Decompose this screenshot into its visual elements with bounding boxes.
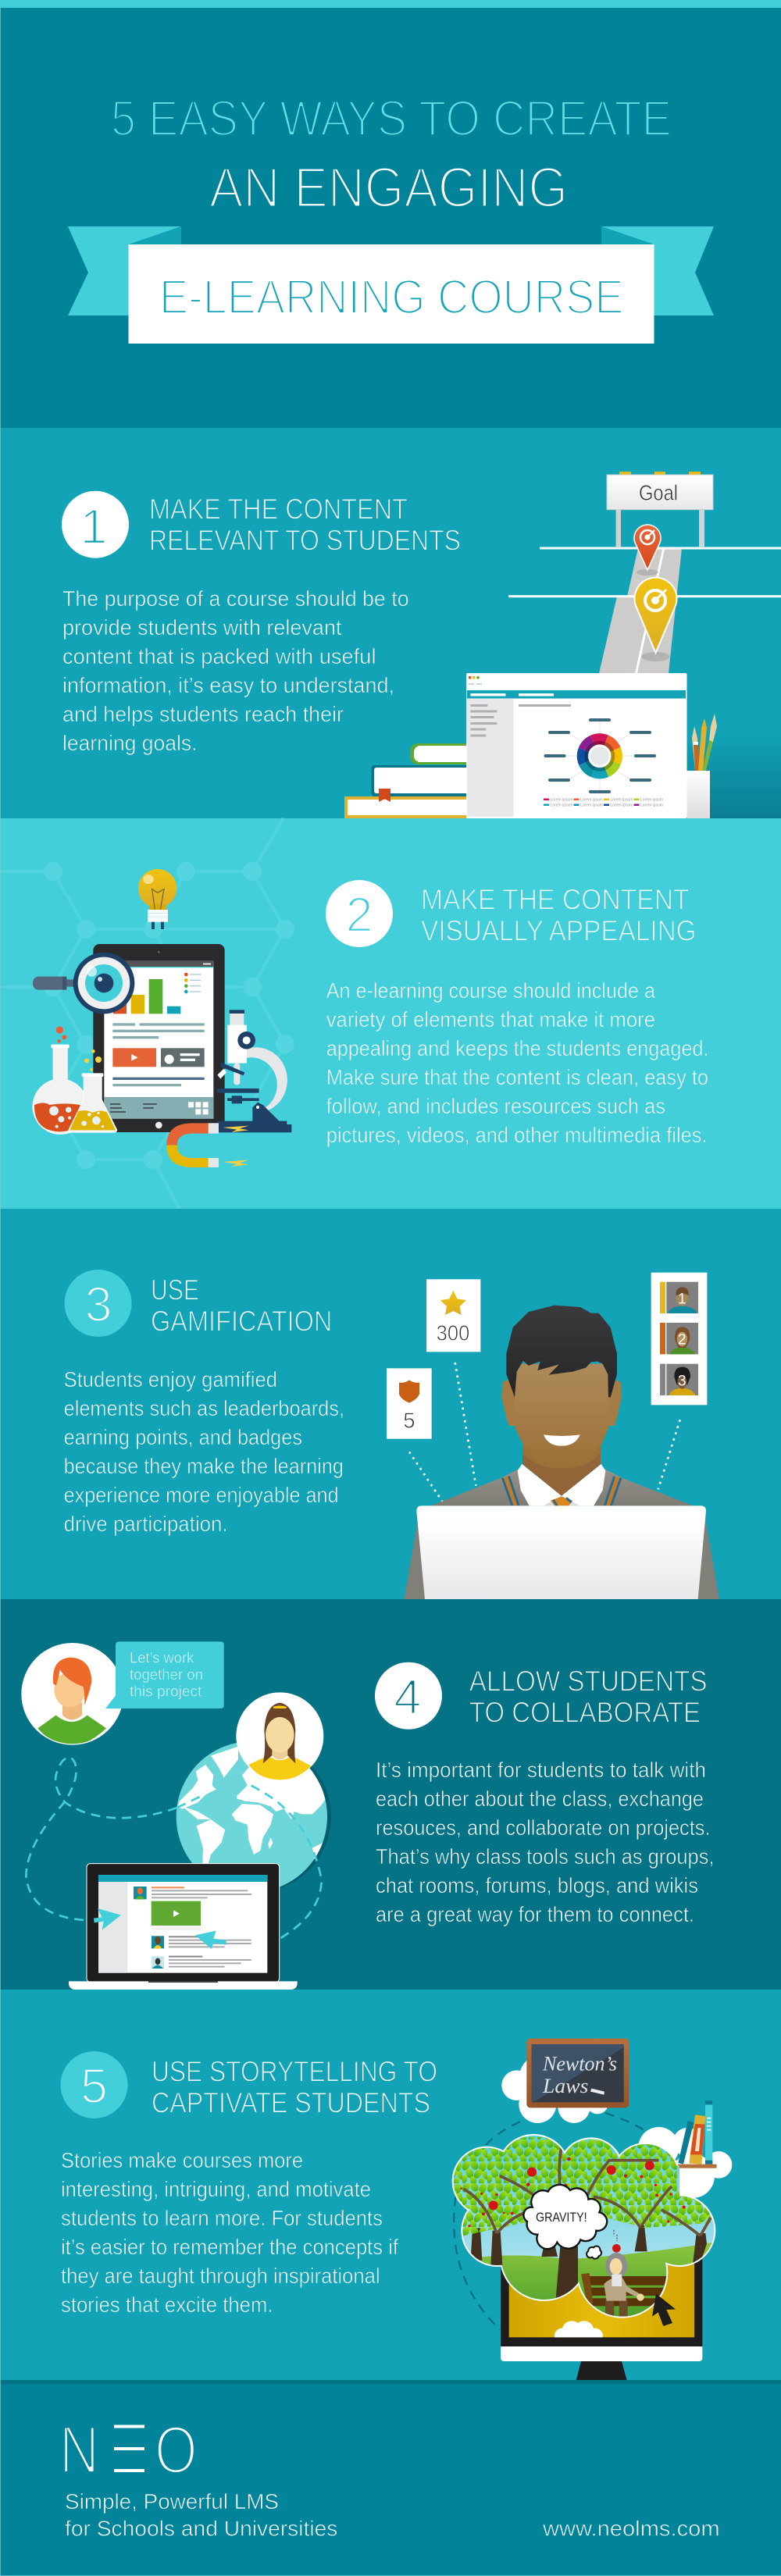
- conical flask: [69, 1049, 116, 1132]
- dashed arc: [454, 2113, 643, 2329]
- number badge 1: 1: [80, 500, 108, 554]
- body text 2: Make sure that the content is clean, easy to: [326, 1064, 708, 1089]
- number badge 5: [61, 2051, 128, 2118]
- small cloud on screen: [555, 2321, 603, 2337]
- body text 5: interesting, intriguing, and motivate: [61, 2176, 371, 2201]
- heading 3: [151, 1274, 332, 1337]
- story scene: apple trees: [451, 2134, 719, 2321]
- body text 2: An e-learning course should include a: [326, 978, 655, 1003]
- avatar post 3: [152, 1956, 251, 1969]
- blackboard: Newton’s: [542, 2053, 617, 2075]
- body text 3: because they make the learning: [64, 1453, 344, 1478]
- arrow into laptop left: [94, 1908, 121, 1930]
- icon: light bulb: [138, 869, 177, 929]
- bookmark: [379, 789, 390, 802]
- body text 2: pictures, videos, and other multimedia files.: [326, 1122, 708, 1147]
- body text 5: stories that excite them.: [61, 2292, 273, 2317]
- card: points 300: 300: [437, 1320, 469, 1345]
- dotted connectors: [409, 1363, 680, 1505]
- collaboration illustration: [21, 1641, 331, 1990]
- icon: orange map pin: [634, 525, 661, 570]
- body text 5: [61, 2147, 398, 2317]
- globe: [177, 1741, 331, 1892]
- body text 2: variety of elements that make it more: [326, 1007, 655, 1031]
- chart legend: Lorem ipsum: [611, 803, 633, 807]
- chart legend: Lorem ipsum: [550, 803, 572, 807]
- logo: NEO: O: [155, 2412, 198, 2488]
- body text 3: drive participation.: [64, 1511, 228, 1536]
- logo: NEO: N: [59, 2412, 99, 2488]
- speech bubble: this project: [130, 1684, 202, 1701]
- number badge 4: [375, 1662, 442, 1730]
- body text 1: [62, 586, 409, 755]
- branches: [462, 2147, 712, 2236]
- number badge 2: 2: [345, 888, 373, 942]
- avatar post 1: [134, 1887, 251, 1899]
- heading 2: [421, 884, 697, 946]
- dashed route to laptop right: [177, 1786, 322, 1944]
- dashed route to laptop left: [26, 1758, 177, 1920]
- heading 2: VISUALLY APPEALING: [421, 915, 697, 946]
- panel: footer: [0, 2380, 781, 2576]
- panel: step 4 collaborate: [0, 1599, 781, 1990]
- body text 3: experience more enjoyable and: [64, 1482, 339, 1507]
- chart legend: Lorem ipsum: [611, 798, 633, 803]
- heading 3: GAMIFICATION: [151, 1306, 332, 1337]
- body text 1: provide students with relevant: [62, 615, 342, 640]
- road with goal sign: [508, 472, 781, 673]
- number badge 4: 4: [394, 1670, 422, 1725]
- laptop with feed: [69, 1864, 298, 1990]
- heading 4: [469, 1665, 708, 1729]
- thought bubble: [523, 2185, 607, 2259]
- person circle orange hair: [21, 1643, 123, 1745]
- video thumbnail: [112, 1048, 156, 1067]
- tablet with dashboard: [93, 944, 225, 1132]
- arrow into laptop right: [195, 1931, 226, 1949]
- body text 2: [326, 978, 709, 1147]
- body text 1: content that is packed with useful: [62, 643, 376, 668]
- smile: [544, 1434, 580, 1446]
- story cloud outline: [452, 2134, 715, 2318]
- title line 2: AN ENGAGING: [209, 157, 568, 219]
- speech bubble: together on: [130, 1667, 203, 1683]
- icon: yellow map pin: [635, 578, 676, 653]
- card: points 300: [426, 1279, 480, 1352]
- body text 4: That’s why class tools such as groups,: [376, 1844, 714, 1869]
- body text 3: [64, 1366, 344, 1536]
- blackboard: Laws: [542, 2075, 588, 2097]
- books on shelf: [673, 2100, 717, 2168]
- body text 1: information, it’s easy to understand,: [62, 672, 394, 697]
- chart legend: Lorem ipsum: [550, 798, 572, 803]
- blackboard: [526, 2039, 629, 2107]
- chart legend: Lorem ipsum: [580, 798, 603, 803]
- panel: header: [68, 90, 714, 344]
- website: www.neolms.com: [542, 2516, 720, 2541]
- apples: [460, 2157, 686, 2227]
- video player: [152, 1901, 201, 1930]
- body text 2: appealing and keeps the students engaged.: [326, 1035, 709, 1060]
- sweater: [404, 1470, 719, 1599]
- person circle yellow shirt: [236, 1692, 323, 1780]
- body text 1: learning goals.: [62, 730, 197, 755]
- body text 5: they are taught through inspirational: [61, 2263, 380, 2288]
- body text 1: and helps students reach their: [62, 701, 344, 726]
- card: badge 5: [387, 1368, 432, 1439]
- heading 2: MAKE THE CONTENT: [421, 884, 690, 915]
- heading 4: TO COLLABORATE: [469, 1696, 701, 1729]
- monitor: [501, 2239, 702, 2380]
- pen cup with brushes: [687, 714, 717, 818]
- body text 2: follow, and includes resources such as: [326, 1093, 665, 1118]
- body text 4: resouces, and collaborate on projects.: [376, 1815, 711, 1840]
- heading 1: [149, 493, 461, 556]
- panel: step 3 gamification: [0, 1209, 781, 1599]
- shirt and tie: [518, 1464, 605, 1505]
- browser window with wheel chart: [466, 673, 687, 818]
- number badge 3: [65, 1270, 132, 1337]
- tagline: for Schools and Universities: [65, 2516, 337, 2541]
- heading 5: USE STORYTELLING TO: [152, 2055, 437, 2088]
- heading 5: [152, 2055, 437, 2119]
- tagline: Simple, Powerful LMS: [65, 2489, 279, 2514]
- number badge 2: [326, 880, 393, 947]
- cloud behind bookshelf: [638, 2127, 732, 2198]
- hair: [506, 1306, 617, 1397]
- ribbon: [68, 226, 714, 344]
- icon: cursor arrow: [652, 2293, 676, 2326]
- microscope: [217, 1010, 291, 1132]
- body text 4: are a great way for them to connect.: [376, 1901, 694, 1926]
- round flask: [33, 1026, 87, 1134]
- body text 4: [376, 1757, 714, 1926]
- body text 3: elements such as leaderboards,: [64, 1395, 344, 1420]
- chart legend: Lorem ipsum: [580, 803, 603, 807]
- body text 4: each other about the class, exchange: [376, 1786, 704, 1811]
- panel: step 1 content relevant: [0, 428, 781, 818]
- horseshoe magnet: [166, 1123, 248, 1167]
- trunks: [471, 2225, 707, 2298]
- chart legend: Lorem ipsum: [640, 798, 663, 803]
- card: leaderboard: 3: [678, 1373, 686, 1389]
- thought bubble: GRAVITY!: [536, 2210, 587, 2225]
- student with laptop illustration: [387, 1273, 719, 1599]
- avatar post 2: [152, 1936, 251, 1948]
- heading 5: CAPTIVATE STUDENTS: [152, 2086, 430, 2119]
- newton figure: [604, 2230, 644, 2317]
- chart legend: [544, 798, 663, 807]
- speech bubble: Let’s work: [130, 1650, 194, 1666]
- title line 1: 5 EASY WAYS TO CREATE: [111, 90, 672, 146]
- card: leaderboard: 2: [678, 1332, 686, 1349]
- card: leaderboard: 1: [678, 1291, 686, 1307]
- storytelling illustration: [451, 2039, 732, 2380]
- image thumbnail: [161, 1048, 205, 1067]
- card: badge 5: 5: [403, 1408, 415, 1432]
- heading 1: MAKE THE CONTENT: [149, 493, 408, 525]
- logo: NEO: [59, 2412, 198, 2488]
- laptop: [416, 1505, 706, 1599]
- panel: step 5 storytelling: [0, 1990, 781, 2380]
- logo: NEO: E: [113, 2412, 150, 2488]
- body text 4: chat rooms, forums, blogs, and wikis: [376, 1872, 698, 1897]
- stack of books: [344, 743, 473, 818]
- magnifying glass with eye: [33, 953, 134, 1014]
- heading 1: RELEVANT TO STUDENTS: [149, 525, 461, 556]
- body text 4: It’s important for students to talk with: [376, 1757, 706, 1782]
- body text 5: students to learn more. For students: [61, 2205, 383, 2230]
- body text 3: Students enjoy gamified: [64, 1366, 277, 1391]
- body text 1: The purpose of a course should be to: [62, 586, 409, 611]
- goal sign: [607, 475, 713, 510]
- number badge 1: [62, 491, 129, 558]
- bar chart: [113, 979, 180, 1014]
- body text 5: it’s easier to remember the concepts if: [61, 2234, 398, 2259]
- head: [501, 1306, 622, 1496]
- goal sign: Goal: [639, 480, 678, 504]
- number badge 5: 5: [80, 2059, 108, 2114]
- tagline: [65, 2489, 337, 2541]
- body text 3: earning points, and badges: [64, 1424, 302, 1449]
- bench: [581, 2273, 666, 2306]
- cloud behind blackboard: [501, 2055, 608, 2123]
- heading 3: USE: [151, 1274, 199, 1306]
- card: leaderboard: [651, 1273, 707, 1405]
- wheel chart: [577, 734, 622, 779]
- body text 5: Stories make courses more: [61, 2147, 303, 2172]
- heading 4: ALLOW STUDENTS: [469, 1665, 708, 1698]
- ribbon text: E-LEARNING COURSE: [159, 269, 623, 324]
- speech bubble: [105, 1641, 224, 1708]
- number badge 3: 3: [84, 1277, 112, 1332]
- science and tablet illustration: [33, 869, 291, 1167]
- chart legend: Lorem ipsum: [640, 803, 663, 807]
- panel: step 2 visually appealing: [0, 818, 781, 1209]
